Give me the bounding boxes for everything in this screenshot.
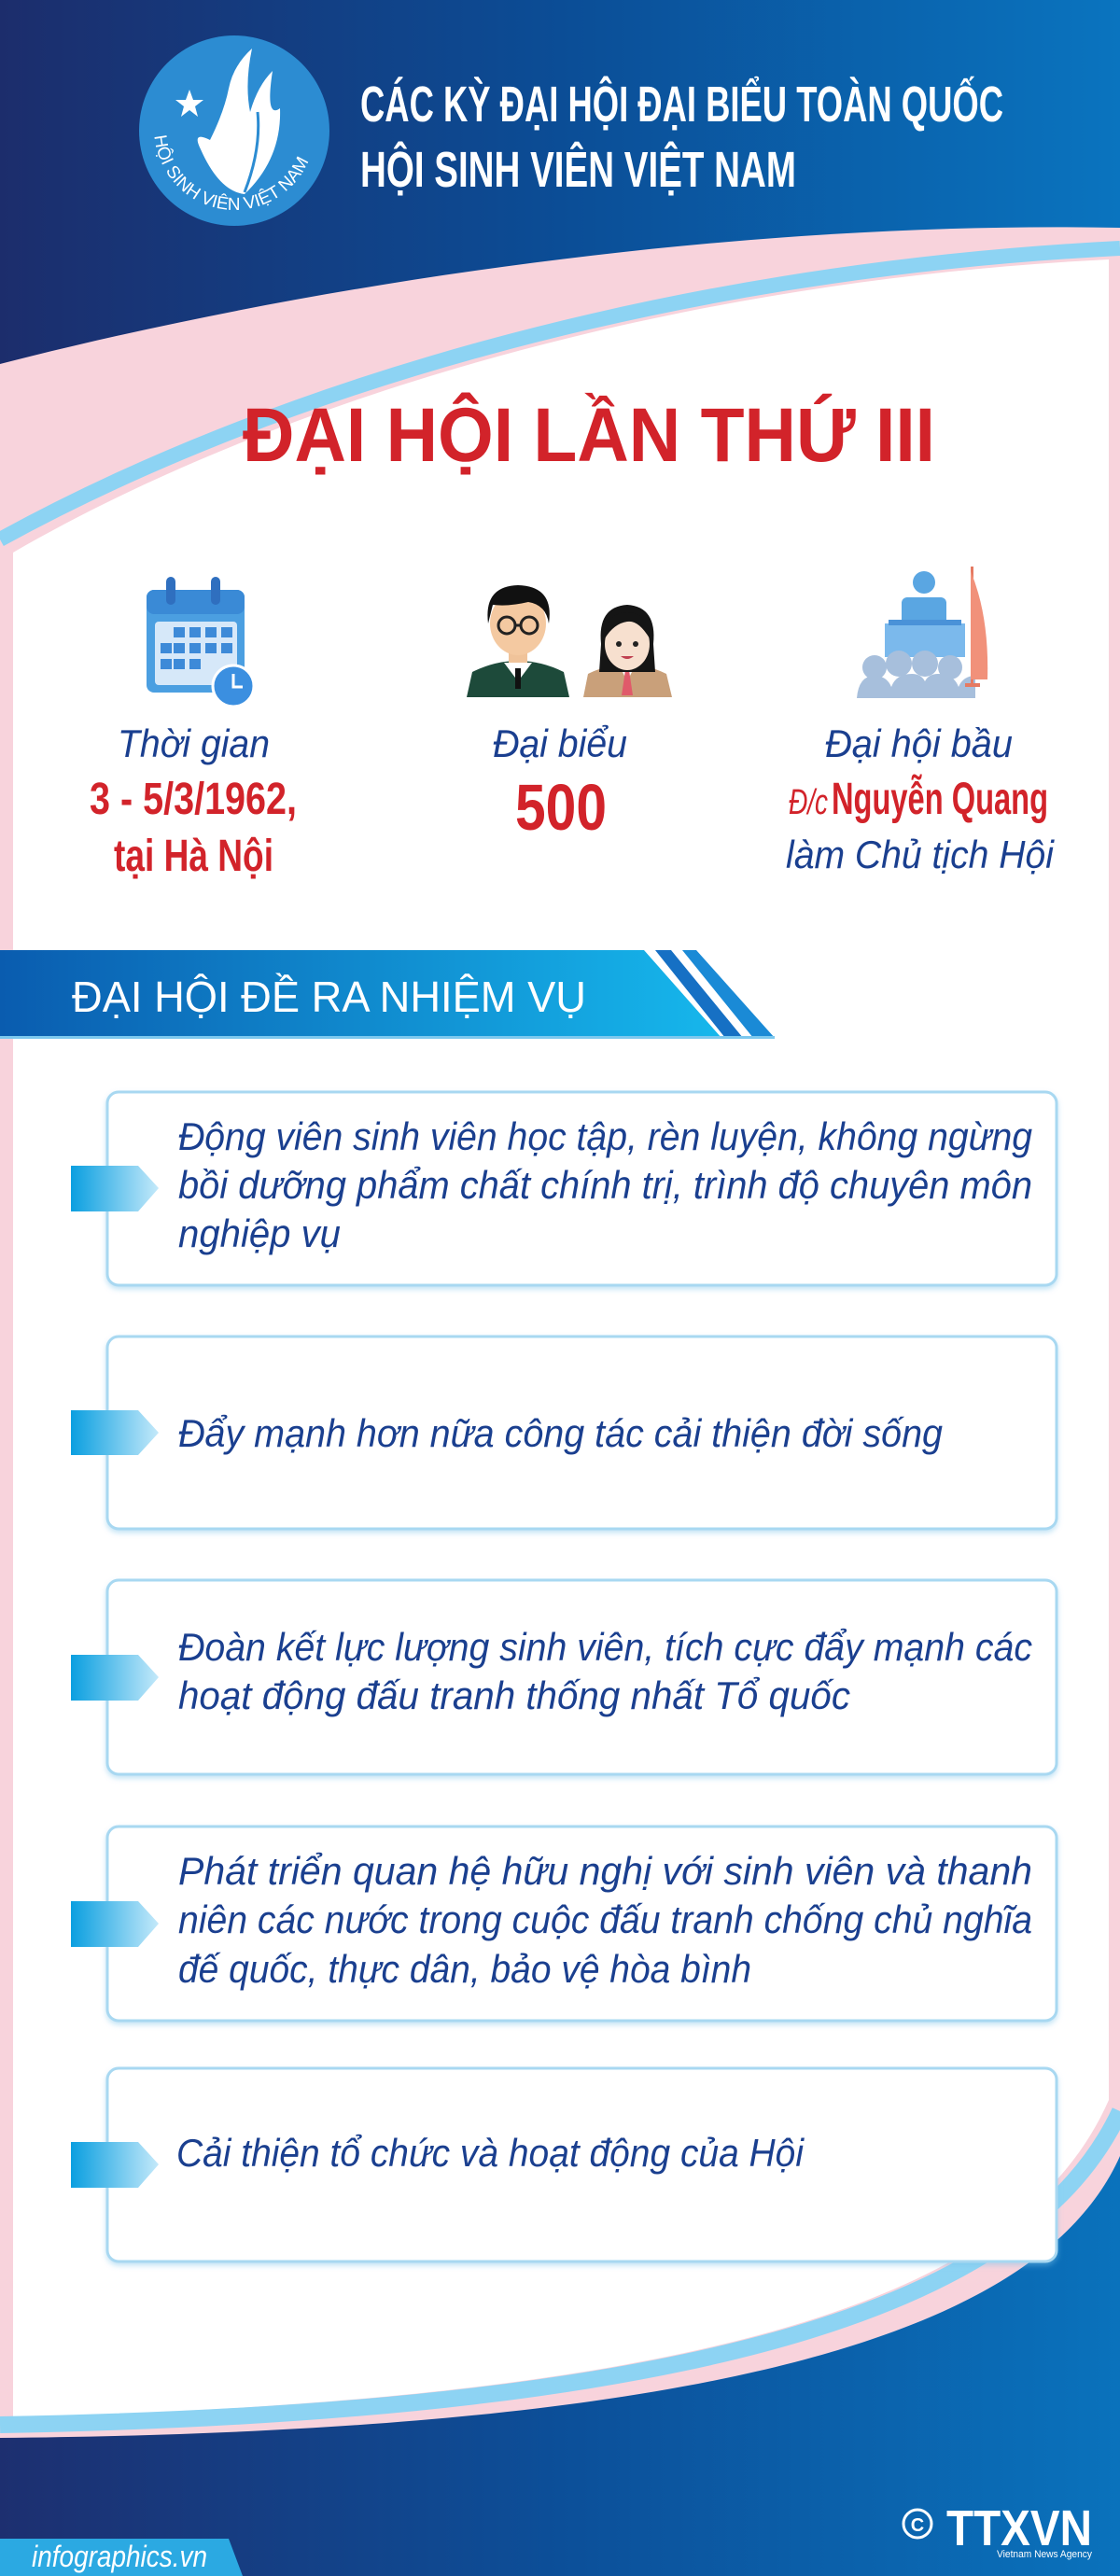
main heading: ĐẠI HỘI LẦN THỨ III bbox=[243, 393, 935, 478]
logo: TTXVN: TTXVN bbox=[946, 2500, 1092, 2556]
info column: chairman bbox=[786, 721, 1056, 876]
logo: Hội Sinh viên Việt Nam bbox=[139, 35, 329, 226]
task card 1: Động viên sinh viên học tập, rèn luyện, không ngừng bbox=[178, 1114, 1032, 1158]
background: footer blue wave bbox=[0, 2156, 1120, 2576]
section banner: tasks: ĐẠI HỘI ĐỀ RA NHIỆM VỤ bbox=[72, 973, 586, 1021]
info column: time bbox=[90, 721, 297, 881]
task card 1: bồi dưỡng phẩm chất chính trị, trình độ chuyên môn bbox=[178, 1163, 1032, 1207]
task card 4: Phát triển quan hệ hữu nghị với sinh viên và thanh bbox=[178, 1849, 1032, 1893]
header title bbox=[360, 76, 1003, 198]
logo: TTXVN bbox=[903, 2500, 1092, 2560]
task card 4 bbox=[71, 1827, 1057, 2021]
arrow marker 2 bbox=[71, 1410, 159, 1455]
info column: chairman: Đại hội bầu bbox=[825, 721, 1013, 765]
header title: HỘI SINH VIÊN VIỆT NAM bbox=[360, 141, 796, 198]
task card 5: Cải thiện tổ chức và hoạt động của Hội bbox=[176, 2131, 805, 2175]
background: bottom light blue wave bbox=[0, 2111, 1120, 2425]
task card 3: Đoàn kết lực lượng sinh viên, tích cực đẩy mạnh các bbox=[178, 1625, 1032, 1669]
info column: time: Thời gian bbox=[118, 721, 270, 765]
task card 3: hoạt động đấu tranh thống nhất Tổ quốc bbox=[178, 1673, 850, 1717]
arrow marker 5 bbox=[71, 2142, 159, 2188]
task card 1 bbox=[71, 1092, 1057, 1285]
task card 4: niên các nước trong cuộc đấu tranh chống chủ nghĩa bbox=[178, 1897, 1032, 1941]
info column: time: 3 - 5/3/1962, bbox=[90, 775, 297, 824]
info column: chairman: làm Chủ tịch Hội bbox=[786, 833, 1056, 876]
footer tab: infographics.vn: infographics.vn bbox=[32, 2540, 207, 2573]
logo: Hội Sinh viên Việt Nam: HỘI SINH VIÊN VIỆT NAM bbox=[155, 135, 308, 210]
icon: podium bbox=[857, 567, 987, 698]
arrow marker 1 bbox=[71, 1166, 159, 1211]
section banner: tasks bbox=[0, 950, 775, 1039]
task card 1: nghiệp vụ bbox=[178, 1211, 341, 1255]
logo: TTXVN: Vietnam News Agency bbox=[997, 2549, 1092, 2560]
arrow marker 4 bbox=[71, 1901, 159, 1947]
task card 4: đế quốc, thực dân, bảo vệ hòa bình bbox=[178, 1947, 751, 1991]
info column: delegates: 500 bbox=[515, 771, 607, 844]
task card 3 bbox=[71, 1580, 1057, 1774]
task card 5 bbox=[71, 2068, 1057, 2261]
icon: calendar bbox=[147, 577, 254, 707]
arrow marker 3 bbox=[71, 1655, 159, 1701]
background: header blue wave bbox=[0, 0, 1120, 364]
info column: time: tại Hà Nội bbox=[114, 832, 273, 881]
task card 2: Đẩy mạnh hơn nữa công tác cải thiện đời sống bbox=[178, 1411, 943, 1455]
logo: TTXVN: C bbox=[911, 2515, 924, 2536]
background: top light blue wave bbox=[0, 248, 1120, 539]
task card 2 bbox=[71, 1337, 1057, 1529]
icon: students bbox=[467, 585, 672, 697]
info column: delegates bbox=[493, 721, 627, 844]
info column: chairman: Đ/c bbox=[789, 783, 828, 822]
info column: delegates: Đại biểu bbox=[493, 721, 627, 765]
